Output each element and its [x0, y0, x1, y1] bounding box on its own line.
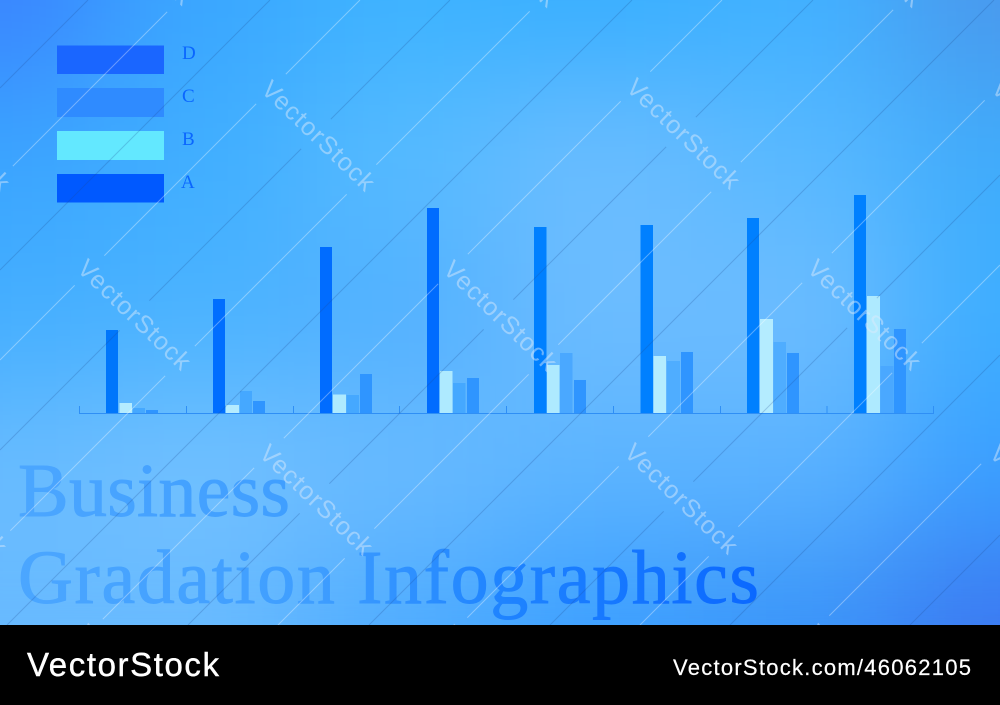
legend item A: A	[181, 172, 195, 193]
bar group 6	[640, 225, 693, 413]
bar group 7	[747, 218, 799, 413]
watermarks: V	[802, 619, 834, 651]
bar group 8	[854, 195, 906, 413]
legend item B	[57, 129, 195, 160]
watermarks: VectorStock	[438, 255, 563, 377]
title	[18, 449, 759, 620]
bar group 1	[106, 330, 158, 413]
footer image id: VectorStock.com/46062105	[673, 655, 971, 680]
watermarks: VectorStock	[254, 439, 379, 561]
watermarks: VectorStock	[72, 254, 197, 376]
watermarks: VectorStock	[256, 75, 381, 197]
legend item A	[57, 172, 195, 202]
title line 2: Gradation Infographics	[18, 536, 759, 620]
watermarks: V	[438, 620, 470, 652]
watermarks: VectorStock	[802, 254, 927, 376]
watermarks: VectorStock	[619, 438, 744, 560]
title line 1: Business	[18, 449, 290, 533]
legend item C	[57, 86, 195, 117]
bar group 2	[213, 299, 265, 413]
legend item B: B	[182, 129, 195, 150]
bar group 5	[534, 227, 586, 413]
footer logo text: VectorStock	[27, 646, 220, 683]
legend	[57, 43, 196, 202]
footer bar	[0, 625, 1000, 705]
legend item D	[57, 43, 196, 74]
watermarks: V	[72, 619, 104, 651]
bar group 3	[320, 247, 372, 413]
legend item C: C	[182, 86, 195, 107]
chart axis	[79, 406, 934, 414]
watermarks: VectorStock	[621, 73, 746, 195]
bar chart	[79, 195, 934, 414]
legend item D: D	[182, 43, 196, 64]
bar group 4	[427, 208, 479, 413]
